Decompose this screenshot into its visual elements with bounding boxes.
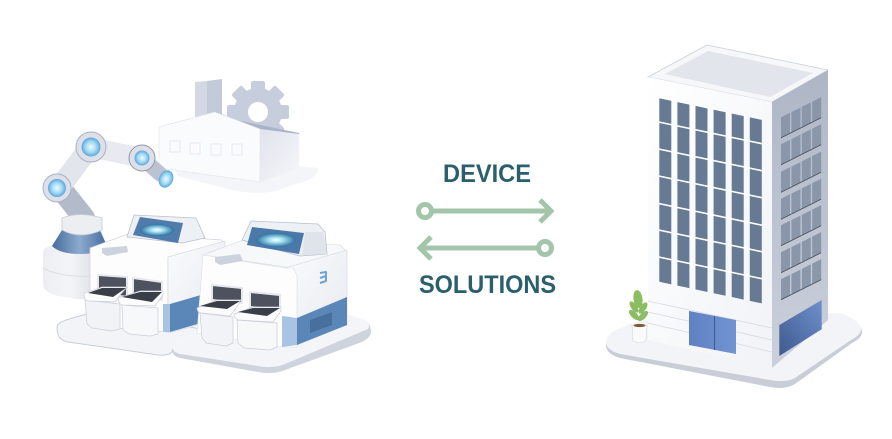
left machine screen xyxy=(133,217,183,243)
front windows grid xyxy=(658,98,763,304)
right machine screen housing xyxy=(242,221,327,256)
left machine slot 1 xyxy=(98,275,127,297)
machine: right xyxy=(197,221,347,350)
platform: left machine xyxy=(57,313,210,355)
arrow: solutions to left xyxy=(420,237,552,259)
building roof xyxy=(648,45,828,102)
robot gripper light xyxy=(156,168,176,190)
arrow: device to right xyxy=(418,200,551,222)
right machine screen xyxy=(247,227,304,254)
gear icon xyxy=(227,81,289,143)
right machine side xyxy=(285,250,347,347)
right machine top xyxy=(203,240,347,268)
leaves xyxy=(627,289,650,323)
right machine slot 2 xyxy=(250,292,280,310)
right machine slot 1 xyxy=(212,285,242,303)
factory front wall xyxy=(159,112,260,182)
factory illustration xyxy=(159,79,318,193)
entrance door xyxy=(689,311,736,354)
factory ground shadow xyxy=(175,166,318,193)
right machine logo xyxy=(320,272,326,283)
label: DEVICE: DEVICE xyxy=(443,160,531,188)
left machine top and front xyxy=(90,234,225,332)
right machine front xyxy=(197,255,297,347)
right machine handle xyxy=(215,254,243,265)
left machine tray 1 xyxy=(84,287,127,331)
factory side wall xyxy=(260,129,299,182)
robot joint: elbow xyxy=(76,132,106,162)
side glass entrance xyxy=(779,300,822,356)
robot joint: shoulder xyxy=(43,174,71,202)
left machine handle xyxy=(102,246,128,256)
machine: left xyxy=(84,215,225,336)
building base platform xyxy=(606,313,862,388)
robot joint: wrist xyxy=(129,145,155,171)
pot xyxy=(632,324,647,342)
factory roof shade xyxy=(215,111,299,137)
ground floor lines xyxy=(648,301,772,352)
robot collar xyxy=(62,214,102,235)
right machine tray 1 xyxy=(197,300,241,346)
right machine tray 2 xyxy=(234,307,281,350)
plant xyxy=(627,289,650,342)
left machine slot 2 xyxy=(133,278,162,300)
platform: right machine xyxy=(172,312,371,373)
building front face xyxy=(648,77,772,368)
robot blue ring xyxy=(52,230,107,254)
robot arm segments xyxy=(60,147,160,218)
side windows grid xyxy=(781,97,821,300)
factory windows xyxy=(170,141,242,155)
left machine screen glow xyxy=(140,224,174,236)
left machine screen housing xyxy=(127,215,205,243)
left machine tray 2 xyxy=(118,291,163,336)
robot base cylinder xyxy=(43,244,110,300)
office building illustration xyxy=(606,45,862,388)
left machine side xyxy=(168,241,225,333)
robot arm xyxy=(43,132,176,300)
left machine blue band xyxy=(163,288,225,332)
right machine blue band xyxy=(282,297,347,347)
right machine screen glow xyxy=(256,233,296,247)
building side face xyxy=(772,70,828,368)
chimney xyxy=(195,79,222,118)
label: SOLUTIONS: SOLUTIONS xyxy=(419,271,556,299)
